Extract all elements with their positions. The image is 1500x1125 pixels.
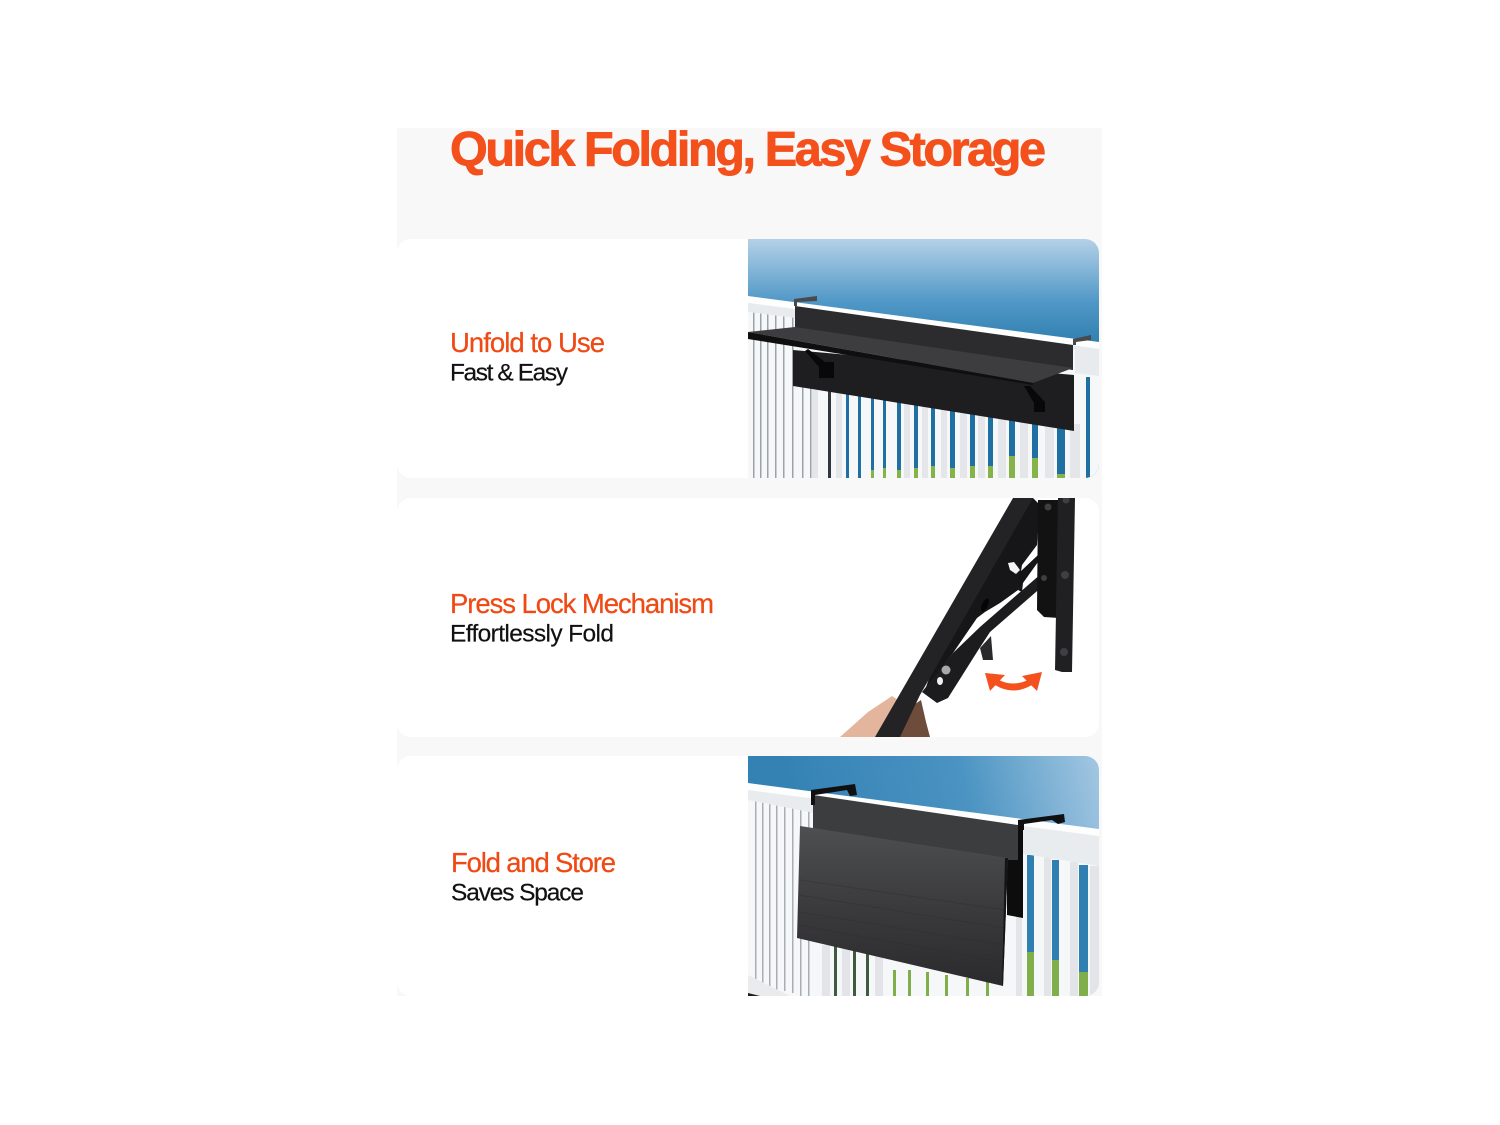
lower mounting board [793, 350, 1074, 431]
upper mounting board [813, 795, 1018, 862]
heading: fold and store: Fold and Store [451, 847, 616, 878]
card background [397, 498, 1099, 737]
wall plate [1037, 500, 1059, 618]
clamp hooks [811, 784, 1065, 830]
upper mounting board [795, 306, 1073, 370]
card background [397, 756, 1099, 996]
panel: unfold to use [397, 239, 1099, 478]
screws [1041, 496, 1070, 656]
heading: unfold to use: Unfold to Use [450, 327, 605, 358]
page background panel [397, 128, 1102, 996]
subheading: fast and easy: Fast & Easy [450, 360, 569, 386]
title: Quick Folding, Easy Storage [450, 122, 1046, 176]
infographic canvas [452, 130, 1099, 996]
photo: unfolded table on balcony railing [748, 239, 1099, 478]
tabletop [748, 327, 1073, 383]
lock slot [981, 598, 989, 612]
plate notch [1008, 562, 1020, 574]
bracket plate on board [925, 498, 1040, 690]
photo: folded table on balcony railing [748, 756, 1099, 996]
panel: press lock mechanism [452, 498, 1075, 737]
wood grain [800, 880, 1005, 945]
table board [875, 498, 1033, 737]
photo: folding bracket and hand [840, 496, 1075, 737]
latch tab [980, 636, 993, 660]
subheading: effortlessly fold: Effortlessly Fold [450, 620, 614, 648]
cross link [1018, 555, 1038, 592]
hand [840, 696, 898, 737]
support brackets [805, 349, 1045, 412]
outer mounting bar [1055, 498, 1075, 672]
heading: press lock mechanism: Press Lock Mechanism [450, 588, 714, 619]
folded tabletop [797, 826, 1008, 986]
icon: orange double arrow [985, 672, 1042, 691]
clamp hooks [794, 296, 1091, 345]
pivot pin [942, 666, 950, 674]
subheading: saves space: Saves Space [451, 880, 584, 906]
card background [397, 239, 1099, 478]
panel: fold and store [397, 756, 1099, 996]
side bracket [1007, 826, 1023, 918]
support arm [922, 573, 1044, 703]
